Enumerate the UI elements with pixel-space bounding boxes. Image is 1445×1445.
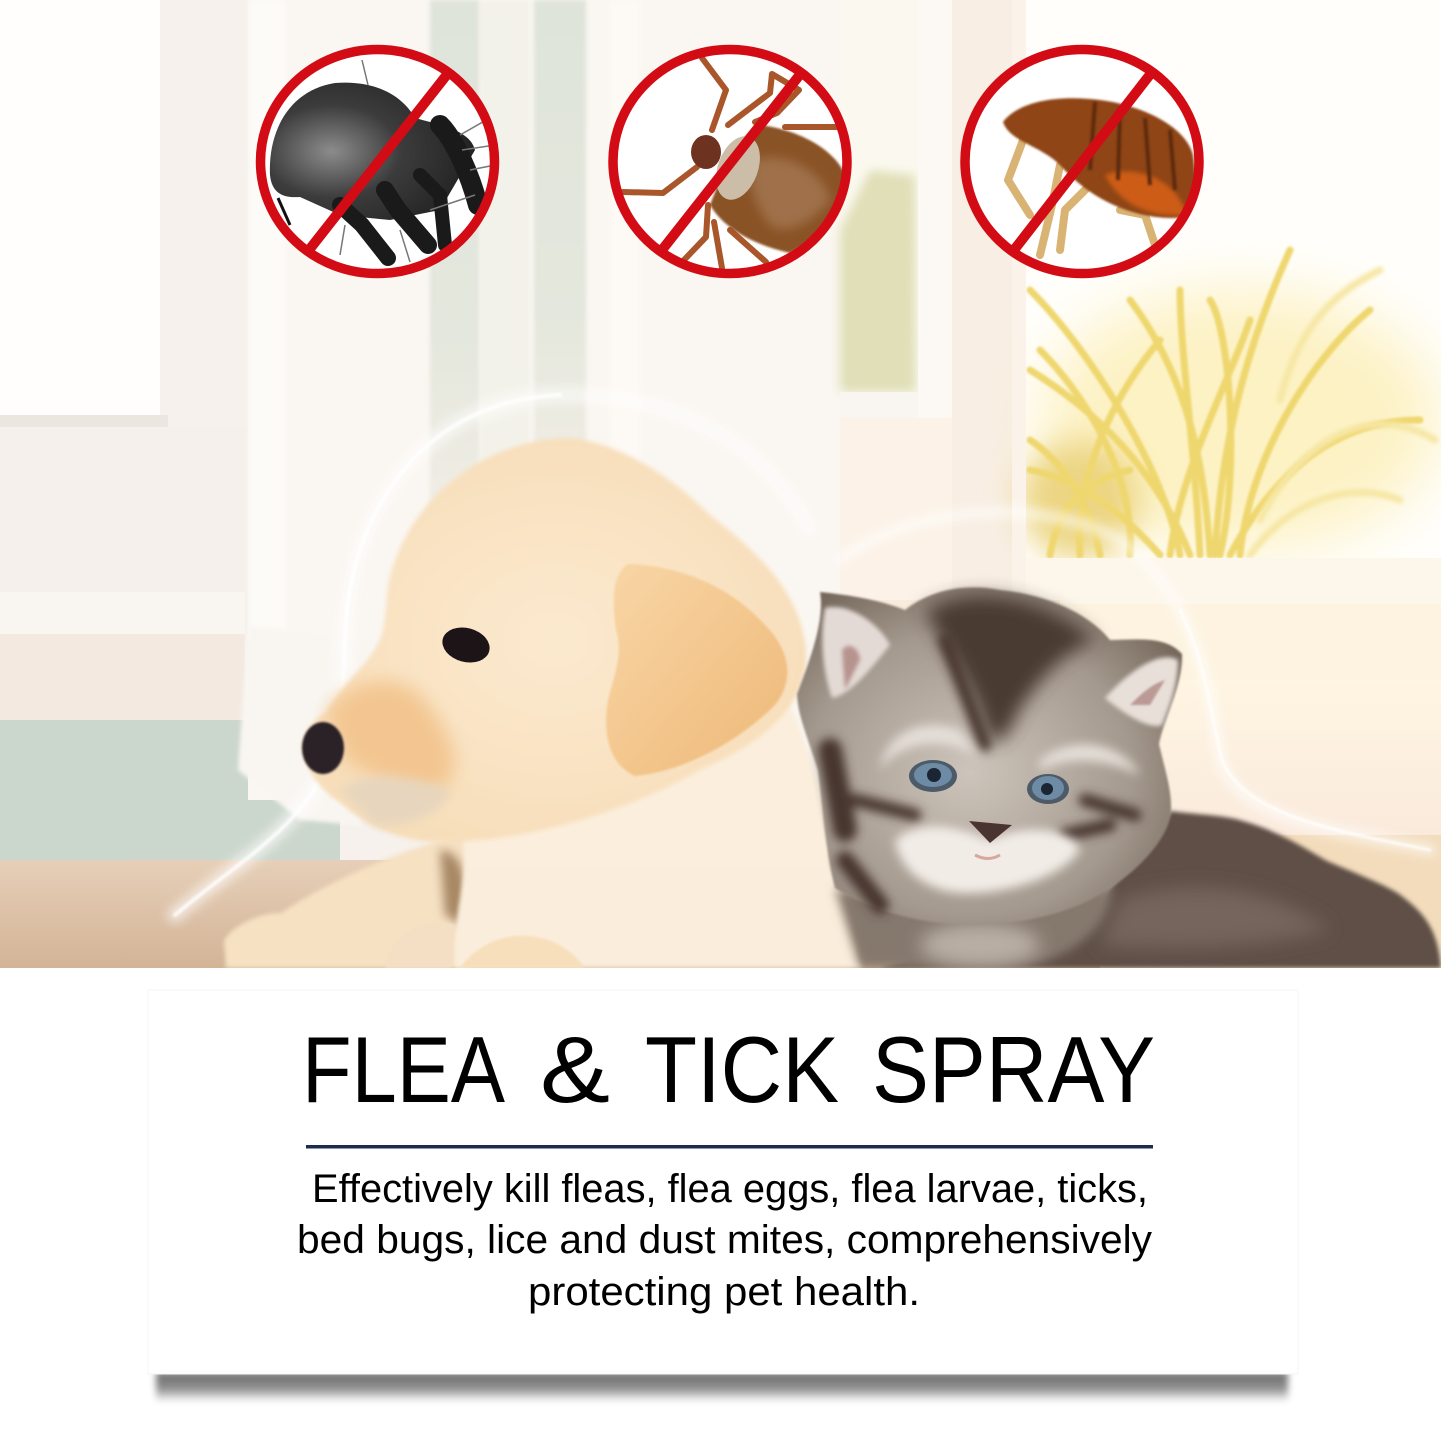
title: & <box>540 1017 610 1122</box>
puppy ear <box>606 564 787 776</box>
kitten body <box>880 811 1441 968</box>
title: TICK <box>645 1017 839 1122</box>
protective vapour swirls <box>175 395 1430 915</box>
right window with plant <box>1012 0 1445 835</box>
puppy front leg <box>224 832 470 968</box>
left window <box>0 0 340 860</box>
title underline <box>306 1145 1153 1148</box>
kitten nose <box>969 821 1012 843</box>
sheer curtain <box>236 0 638 826</box>
puppy <box>224 438 862 968</box>
panel shadow <box>156 1372 1288 1402</box>
title: FLEA <box>302 1017 505 1122</box>
description text <box>297 1167 1152 1314</box>
text panel <box>148 990 1298 1374</box>
puppy muzzle shading <box>326 681 455 793</box>
kitten forehead stripes <box>925 596 1095 742</box>
wall behind pets <box>876 600 1060 608</box>
floor <box>0 860 1100 968</box>
kitten eyes <box>909 760 957 792</box>
icon: tick prohibited <box>613 50 847 274</box>
kitten head <box>797 587 1182 925</box>
icon: flea prohibited <box>965 50 1199 274</box>
title: SPRAY <box>872 1017 1155 1122</box>
kitten ears <box>822 607 890 698</box>
title <box>302 1017 1155 1122</box>
puppy chest <box>454 690 862 968</box>
description text: Effectively kill fleas, flea eggs, flea larvae, ticks, <box>312 1167 1148 1211</box>
puppy eye <box>442 628 490 662</box>
background room photo <box>0 0 1445 968</box>
kitten muzzle <box>895 826 1080 893</box>
icon: dust mite prohibited <box>260 50 495 274</box>
kitten <box>797 587 1441 968</box>
description text: bed bugs, lice and dust mites, comprehensively <box>297 1218 1152 1262</box>
description text: protecting pet health. <box>528 1270 920 1314</box>
puppy head <box>302 438 806 842</box>
puppy paws <box>385 922 455 968</box>
kitten cheeks <box>880 725 980 770</box>
middle window and door frame <box>840 0 1014 618</box>
kitten chest <box>835 880 1111 968</box>
puppy nose <box>302 722 344 774</box>
